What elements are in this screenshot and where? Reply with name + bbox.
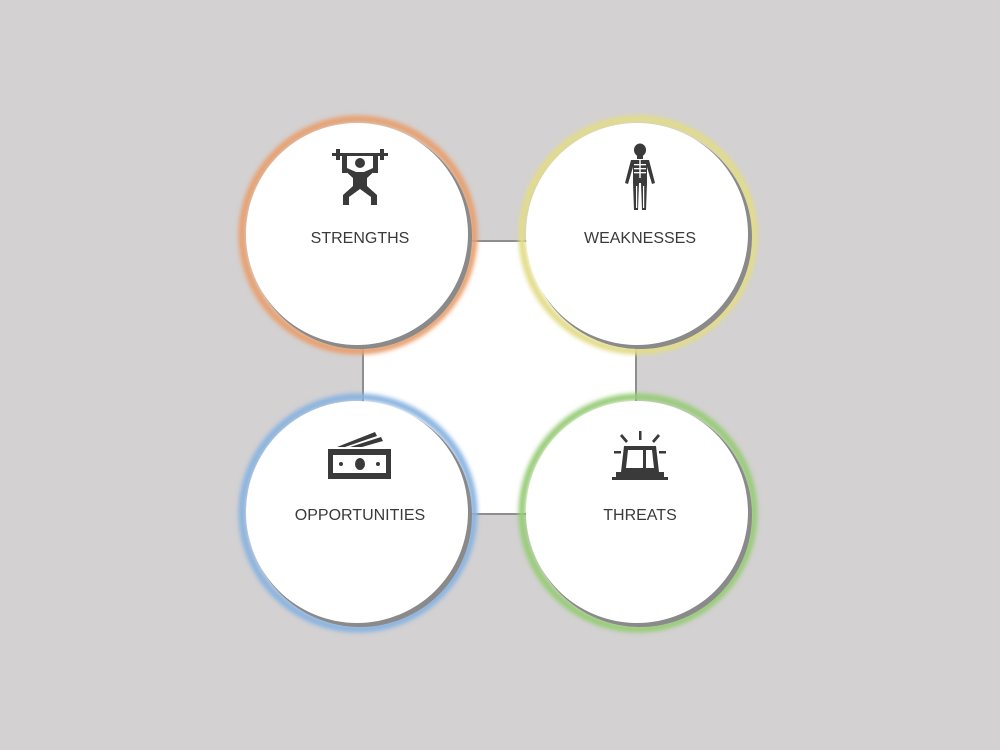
center connector panel (363, 241, 636, 514)
icon: skeleton (625, 144, 655, 210)
panel: weaknesses (522, 119, 754, 351)
label: weaknesses: WEAKNESSES (584, 230, 696, 247)
icon: weightlifter (332, 149, 388, 205)
panel: strengths (242, 119, 474, 351)
panel: threats (522, 397, 754, 629)
icon: money (328, 432, 391, 479)
label: threats: THREATS (603, 507, 677, 524)
panel: opportunities (242, 397, 474, 629)
label: strengths: STRENGTHS (311, 230, 409, 247)
label: opportunities: OPPORTUNITIES (295, 507, 425, 524)
icon: siren (612, 431, 668, 480)
